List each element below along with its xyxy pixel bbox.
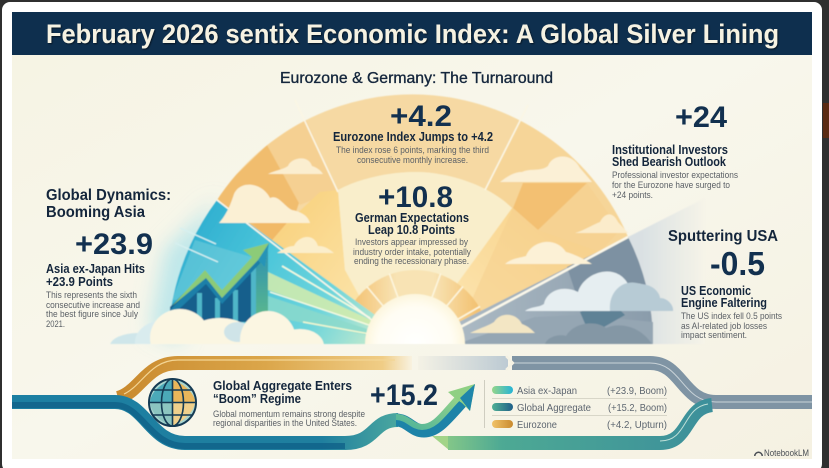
left small orange facet xyxy=(259,229,281,240)
text block: sputtering USA: impact sentiment. xyxy=(681,330,747,341)
text block: booming Asia: the best figure since July xyxy=(46,309,138,320)
left light facet xyxy=(267,118,338,205)
legend row: Eurozone: (+4.2, Upturn) xyxy=(607,419,667,431)
legend xyxy=(484,380,667,431)
text block: global aggregate: Global momentum remains strong despite xyxy=(213,409,365,420)
text block: institutional investors xyxy=(612,101,738,201)
text block: sputtering USA xyxy=(668,228,782,341)
right diamond facet xyxy=(513,183,587,230)
legend row: Asia ex-Japan xyxy=(492,385,667,397)
text block: institutional investors: for the Eurozone have surged to xyxy=(612,180,730,191)
divider white rays xyxy=(295,100,338,192)
legend row: Global Aggregate: Global Aggregate xyxy=(517,402,591,414)
title: February 2026 sentix Economic Index: A Global Silver Lining xyxy=(46,19,779,49)
text block: institutional investors: Institutional Investors xyxy=(612,143,728,157)
text block: booming Asia: +23.9 Points xyxy=(46,275,113,289)
gray glow beyond USA wedge xyxy=(628,198,705,344)
text block: global aggregate: Global Aggregate Enters xyxy=(213,378,352,393)
number: +15.2: +15.2 xyxy=(370,379,438,412)
gold ribbon xyxy=(118,363,412,398)
background tab sliver xyxy=(823,103,829,138)
text block: booming Asia: +23.9 xyxy=(75,228,153,261)
gold beam left xyxy=(270,190,373,321)
pale centre label wedge xyxy=(338,172,512,344)
legend row: Eurozone xyxy=(492,419,667,431)
text block: Eurozone index: +4.2 xyxy=(390,100,452,133)
gray ribbon light part xyxy=(418,356,508,370)
text block: German expectations: industry order intake, potentially xyxy=(353,247,471,258)
teal ribbon xyxy=(432,436,449,450)
legend row: Asia ex-Japan: (+23.9, Boom) xyxy=(607,385,667,397)
ring separators xyxy=(366,274,480,320)
icon: growth arrow xyxy=(396,384,475,431)
text block: Eurozone index: The index rose 6 points, marking the third xyxy=(336,145,489,156)
sun xyxy=(364,294,466,345)
cyan glow beyond Asia wedge xyxy=(150,200,217,344)
flow ribbons xyxy=(12,356,812,450)
gold beam right xyxy=(440,208,600,330)
legend row: Asia ex-Japan: Asia ex-Japan xyxy=(517,385,577,397)
text block: booming Asia xyxy=(46,187,171,330)
left dark facet xyxy=(215,145,300,230)
text block: sputtering USA: US Economic xyxy=(681,284,751,298)
text block: German expectations xyxy=(353,181,471,267)
legend row: Global Aggregate: (+15.2, Boom) xyxy=(608,402,667,414)
text block: sputtering USA: as AI-related job losses xyxy=(681,321,767,332)
icon: globe xyxy=(149,379,196,426)
legend row: Global Aggregate xyxy=(492,402,667,414)
text block: Eurozone index: consecutive monthly increase. xyxy=(357,155,468,166)
sector: Asia wedge xyxy=(171,200,375,345)
right side of band xyxy=(487,122,627,247)
text block: sputtering USA: Engine Faltering xyxy=(681,296,767,310)
text block: sputtering USA: -0.5 xyxy=(710,245,765,282)
watermark: NotebookLM: NotebookLM xyxy=(764,448,809,458)
text block: German expectations: ending the recessionary phase. xyxy=(354,256,469,267)
clouds on orange band xyxy=(219,185,310,223)
text block: German expectations: Investors appear impressed by xyxy=(355,237,468,248)
text block: booming Asia: Global Dynamics: xyxy=(46,187,171,204)
sector: USA wedge xyxy=(460,267,652,342)
light rays in Asia wedge xyxy=(267,272,371,324)
text block: German expectations: German Expectations xyxy=(355,211,469,225)
Asia clouds xyxy=(110,270,674,345)
text block: global aggregate: “Boom” Regime xyxy=(213,391,301,406)
sun ring xyxy=(355,270,481,322)
heading: Eurozone and Germany: Eurozone & Germany: The Turnaround xyxy=(280,70,553,87)
text block: institutional investors: +24 points. xyxy=(612,190,653,201)
text block: institutional investors: +24 xyxy=(675,101,727,134)
text block: institutional investors: Shed Bearish Outlook xyxy=(612,155,726,169)
text block: booming Asia: Booming Asia xyxy=(46,204,145,221)
title bar xyxy=(12,12,812,55)
text block: Eurozone index xyxy=(333,100,493,166)
panel: sunburst fan xyxy=(110,94,691,349)
text block: Eurozone index: Eurozone Index Jumps to +4.2 xyxy=(333,130,493,144)
text block: institutional investors: Professional investor expectations xyxy=(612,170,738,181)
text block: booming Asia: 2021. xyxy=(46,319,65,330)
gray ribbon dark part xyxy=(512,363,812,402)
icon: rising chart xyxy=(170,243,269,322)
sector: inner pale band xyxy=(270,172,560,344)
text block: German expectations: +10.8 xyxy=(378,181,453,214)
blue ribbon xyxy=(12,402,398,443)
text block: global aggregate xyxy=(213,378,365,429)
text block: global aggregate: regional disparities in the United States. xyxy=(213,418,357,429)
text block: booming Asia: Asia ex-Japan Hits xyxy=(46,262,145,276)
sector: orange outer band xyxy=(217,94,628,252)
text block: German expectations: Leap 10.8 Points xyxy=(368,223,455,237)
text block: sputtering USA: The US index fell 0.5 points xyxy=(681,311,782,322)
text block: booming Asia: This represents the sixth xyxy=(46,290,137,301)
text block: booming Asia: consecutive increase and xyxy=(46,300,140,311)
text block: sputtering USA: Sputtering USA xyxy=(668,228,778,245)
legend row: Eurozone: Eurozone xyxy=(517,419,557,431)
USA clouds xyxy=(470,315,535,333)
